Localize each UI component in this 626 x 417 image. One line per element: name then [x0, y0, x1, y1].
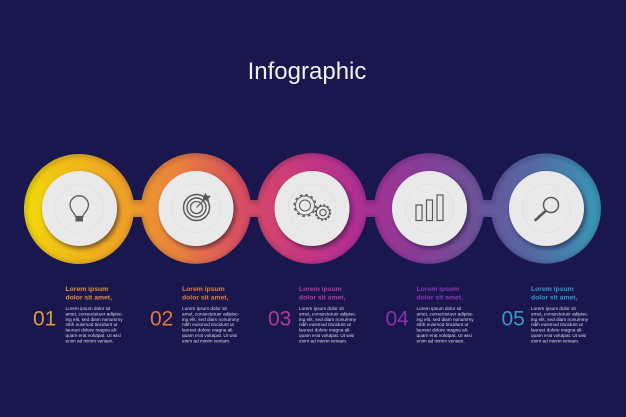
text block 02: dolor sit amet,	[182, 294, 229, 302]
text block 03: 03	[268, 308, 291, 330]
text block 02: enim ad minim veniam.	[182, 338, 230, 343]
text block 05: amet, consectetuer adipisc-	[531, 311, 589, 316]
text block 03: amet, consectetuer adipisc-	[299, 311, 357, 316]
step 3: gears disc	[274, 171, 350, 246]
text block 05: enim ad minim veniam.	[531, 338, 579, 343]
text block 01: nibh euismod tincidunt ut	[66, 322, 118, 327]
text block 04: amet, consectetuer adipisc-	[416, 311, 474, 316]
text block 04: Lorem ipsum dolor sit	[416, 306, 462, 311]
icon: gears	[294, 195, 330, 220]
step 4: bar chart disc	[392, 171, 467, 246]
connected gradient ring band	[24, 153, 601, 265]
text block 01: Lorem ipsum	[66, 286, 108, 293]
text block 04: dolor sit amet,	[416, 294, 463, 302]
step 2: target disc	[158, 171, 234, 246]
text block 03	[268, 286, 357, 343]
text block 02: Lorem ipsum dolor sit	[182, 306, 228, 311]
icon: target	[184, 193, 211, 220]
text block 05: laoreet dolore magna ali-	[531, 328, 583, 333]
text block 03: Lorem ipsum	[299, 286, 342, 293]
text block 03: nibh euismod tincidunt ut	[299, 322, 352, 327]
text block 02	[150, 286, 240, 343]
text block 01	[33, 286, 123, 343]
text block 01: Lorem ipsum dolor sit	[66, 306, 111, 311]
step 5: magnifier disc	[509, 171, 584, 246]
title: Infographic	[248, 58, 366, 85]
text block 05: Lorem ipsum	[531, 286, 574, 293]
text block 03: enim ad minim veniam.	[299, 338, 347, 343]
text block 04: laoreet dolore magna ali-	[416, 328, 469, 333]
text block 02: 02	[150, 308, 173, 330]
text block 04: quam erat volutpat. Ut wisi	[416, 333, 472, 338]
icon: bar chart	[416, 195, 443, 220]
text block 05: nibh euismod tincidunt ut	[531, 322, 584, 327]
text block 02: amet, consectetuer adipisc-	[182, 311, 240, 316]
text block 04	[386, 286, 474, 343]
text block 01: dolor sit amet,	[66, 294, 112, 302]
text block 03: quam erat volutpat. Ut wisi	[299, 333, 354, 338]
text block 01: enim ad minim veniam.	[66, 338, 114, 343]
text block 01: 01	[33, 308, 56, 330]
text block 01: quam erat volutpat. Ut wisi	[66, 333, 121, 338]
text block 05: Lorem ipsum dolor sit	[531, 306, 577, 311]
text block 01: ing elit, sed diam nonummy	[66, 317, 123, 322]
text block 02: Lorem ipsum	[182, 286, 225, 293]
text block 04: nibh euismod tincidunt ut	[416, 322, 469, 327]
text block 02: quam erat volutpat. Ut wisi	[182, 333, 237, 338]
text block 04: Lorem ipsum	[416, 286, 459, 293]
text block 03: dolor sit amet,	[299, 294, 346, 302]
text block 05: 05	[502, 308, 525, 330]
text block 05	[502, 286, 589, 343]
text block 01: amet, consectetuer adipisc-	[66, 311, 123, 316]
text block 01: laoreet dolore magna ali-	[66, 328, 118, 333]
text block 04: 04	[386, 308, 409, 330]
icon: magnifier	[536, 198, 558, 220]
text block 04: ing elit, sed diam nonummy	[416, 317, 474, 322]
icon: lightbulb	[70, 196, 88, 222]
text block 05: ing elit, sed diam nonummy	[531, 317, 589, 322]
text block 03: Lorem ipsum dolor sit	[299, 306, 345, 311]
text block 05: quam erat volutpat. Ut wisi	[531, 333, 586, 338]
text block 02: ing elit, sed diam nonummy	[182, 317, 240, 322]
text block 02: laoreet dolore magna ali-	[182, 328, 234, 333]
text block 04: enim ad minim veniam.	[416, 338, 465, 343]
text block 05: dolor sit amet,	[531, 294, 578, 302]
text block 03: ing elit, sed diam nonummy	[299, 317, 357, 322]
step 1: lightbulb disc	[42, 171, 117, 246]
text block 03: laoreet dolore magna ali-	[299, 328, 351, 333]
text block 02: nibh euismod tincidunt ut	[182, 322, 235, 327]
